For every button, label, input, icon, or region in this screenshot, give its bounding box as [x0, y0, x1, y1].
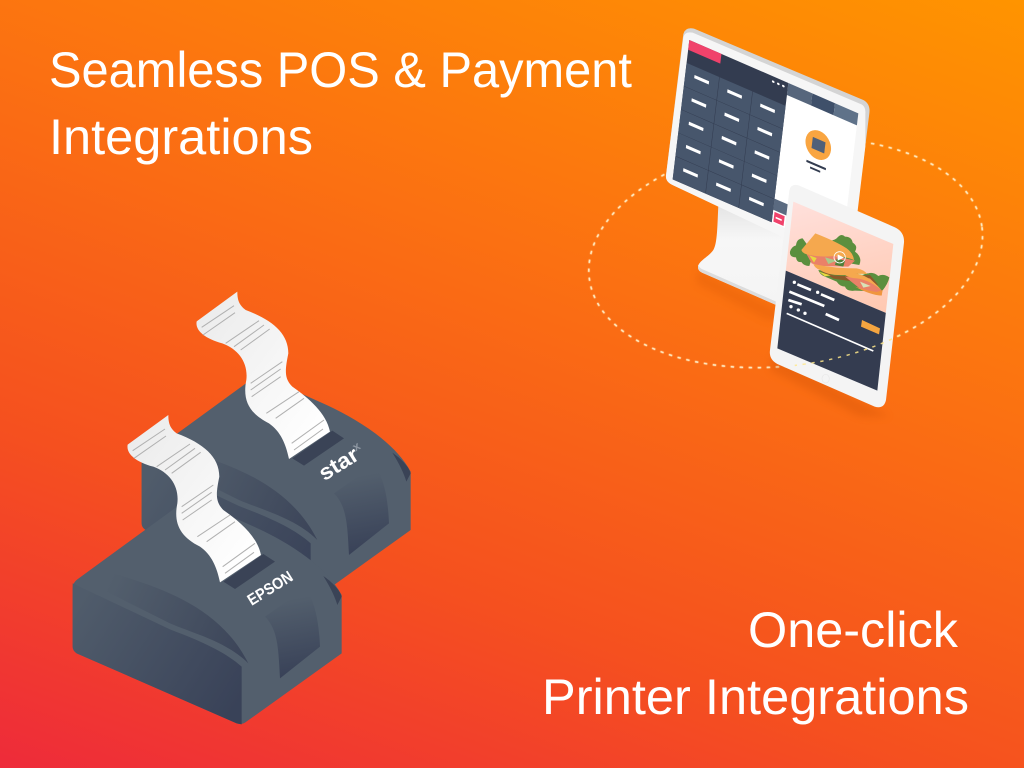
brand: star: star [314, 442, 364, 486]
receipt paper [196, 292, 330, 459]
curved top sweep [176, 448, 317, 540]
POS monitor [666, 28, 870, 253]
right white order panel [772, 83, 858, 253]
paper slot [292, 431, 344, 466]
title: seamless POS and payment integrations: Seamless POS & Payment [49, 42, 632, 98]
wrap filling [807, 254, 878, 285]
caption: one-click printer integrations: Printer Integrations [542, 669, 969, 725]
menu grid cells [673, 63, 786, 222]
dashed orbit ellipse [575, 115, 997, 391]
product caption lines [806, 160, 826, 175]
monitor stand base edge [698, 265, 780, 307]
paper slot [223, 554, 275, 589]
panel tabs [787, 83, 858, 125]
corner wedge [323, 576, 342, 605]
printer body [73, 498, 342, 724]
title: seamless POS and payment integrations [49, 42, 632, 165]
front face [73, 583, 242, 724]
details panel [777, 271, 886, 391]
play icon [834, 252, 845, 263]
three dots [772, 80, 785, 88]
lettuce [790, 235, 889, 292]
brand mark: x [350, 439, 363, 454]
caption: one-click printer integrations [542, 602, 969, 725]
illustration: POS terminal and tablet [575, 28, 997, 417]
illustration: Star receipt printer [142, 292, 411, 601]
middle wrap [813, 264, 867, 275]
stand shadow [697, 270, 793, 320]
monitor bezel [666, 32, 865, 237]
panel footer strip [773, 199, 844, 240]
home button [822, 374, 829, 383]
product circle icon [804, 126, 833, 164]
top wrap [801, 233, 854, 260]
receipt text lines [202, 306, 324, 450]
orange order button [861, 320, 880, 334]
food photo background [786, 202, 893, 313]
side recess [265, 588, 320, 678]
receipt paper [127, 415, 261, 582]
dashed orbit over tablet [794, 331, 906, 366]
monitor screen [673, 40, 858, 253]
brand: EPSON: EPSON [245, 568, 296, 609]
caption: one-click printer integrations: One-click [748, 602, 959, 658]
menu item labels [683, 75, 775, 206]
monitor casing back edge [666, 28, 870, 237]
corner wedge [392, 453, 411, 482]
tablet shadow [770, 353, 890, 417]
side recess [334, 465, 389, 555]
lower wrap [845, 273, 883, 296]
title: seamless POS and payment integrations: Integrations [49, 109, 313, 165]
dark menu panel [673, 40, 788, 222]
tablet screen [777, 202, 893, 391]
pink header tab [688, 40, 721, 64]
front face [142, 460, 311, 601]
illustration: Epson receipt printer [73, 415, 342, 724]
monitor stand [698, 205, 800, 307]
pink action button [773, 212, 785, 226]
tablet [770, 185, 906, 408]
receipt text lines [133, 429, 255, 573]
product details text lines [787, 281, 873, 351]
curved top sweep [107, 572, 248, 663]
food illustration: wraps with lettuce [790, 233, 889, 296]
printer body [142, 374, 411, 601]
tablet body [770, 185, 904, 407]
